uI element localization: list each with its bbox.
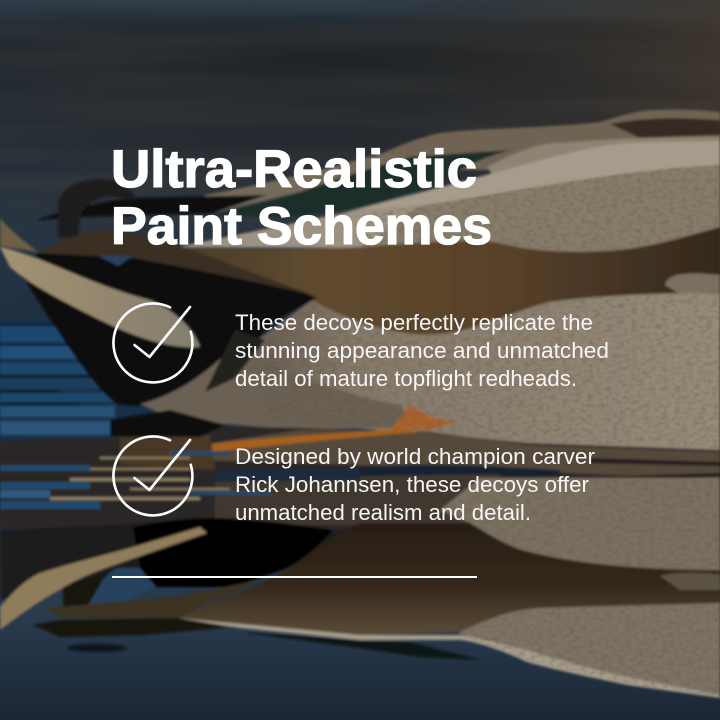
cream band	[340, 141, 720, 240]
breast feathers	[140, 345, 415, 430]
reflected brown band	[177, 523, 720, 635]
lower flank	[440, 478, 720, 570]
green speculum	[213, 150, 510, 217]
cream above speculum	[205, 153, 410, 213]
divider line	[112, 576, 477, 578]
dark wing feathers	[37, 195, 267, 220]
lower wing	[37, 230, 317, 296]
text block: paint detail: detail of mature topflight redheads.	[235, 366, 577, 391]
text block: designer: Rick Johannsen, these decoys offer	[235, 472, 589, 497]
brown band	[178, 227, 720, 335]
dark water shadow	[110, 410, 225, 437]
reflected tan tail	[0, 527, 207, 630]
title: Paint Schemes	[111, 197, 492, 256]
neck curl	[58, 179, 137, 238]
text block: designer: Designed by world champion carver	[235, 444, 595, 469]
orange foot	[392, 405, 458, 430]
reflection band	[0, 425, 720, 530]
text block: designer	[235, 444, 595, 525]
textured tan back	[360, 165, 720, 265]
text block: paint detail: stunning appearance and unmatched	[235, 338, 609, 363]
text block: paint detail	[235, 310, 609, 391]
title: Ultra-Realistic	[111, 140, 477, 199]
blue gap and leg	[87, 568, 155, 607]
text block: designer: unmatched realism and detail.	[235, 500, 531, 525]
icon: check circle 2	[113, 436, 192, 515]
text block: paint detail: These decoys perfectly replicate the	[235, 310, 593, 335]
cream rim	[177, 618, 720, 698]
icon: check circle 1	[113, 303, 192, 382]
black hull	[27, 253, 317, 406]
flank	[200, 293, 720, 450]
title	[111, 140, 492, 256]
reflected black	[0, 518, 470, 600]
lower reflected flank	[460, 603, 720, 697]
reflected green	[240, 632, 480, 660]
water ripples	[0, 326, 115, 435]
upper feather	[383, 110, 720, 170]
cream tail stripe	[0, 247, 200, 347]
